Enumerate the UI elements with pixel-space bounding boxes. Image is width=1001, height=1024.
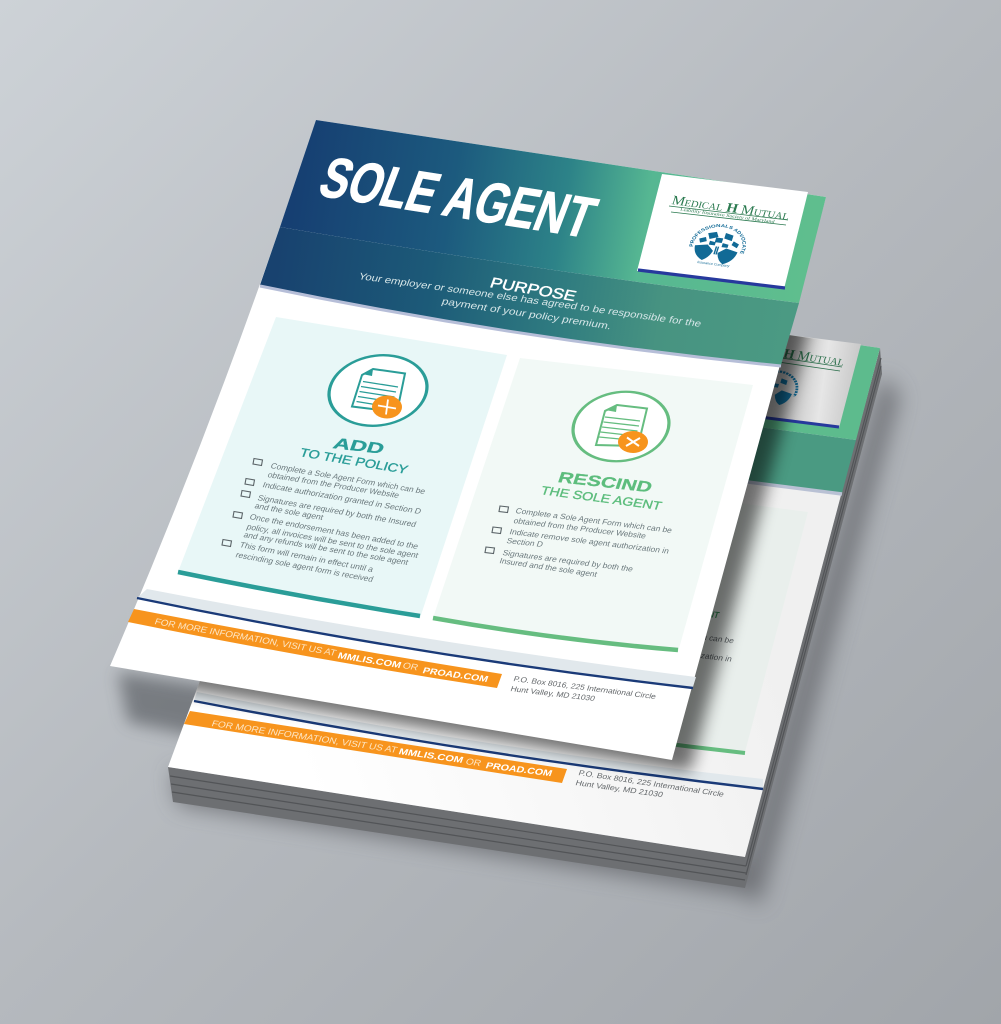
rescind checkboxes [485,506,508,554]
stack page edges [168,348,882,888]
add list: obtained from the Producer Website [266,470,401,500]
shadow: top sheet on stack [192,335,818,782]
purpose heading: PURPOSE [488,275,579,305]
rescind list: Indicate remove sole agent authorization in [508,527,671,555]
banner text [153,617,490,685]
header lower band [260,227,799,365]
add panel bar [178,572,420,616]
add list [234,461,427,584]
logo rules [669,206,788,225]
add panel background [178,317,507,618]
rescind panel background [433,358,753,652]
stack header [310,273,880,494]
header [260,120,826,366]
orange banner [128,609,502,688]
stack logo wordmark: MEDICAL H MUTUAL [729,340,846,369]
stack panel text: THE SOLE AGENT [649,603,721,621]
rescind list: Signatures are required by both the [501,548,635,573]
top sheet [110,120,826,760]
header rule [260,286,781,366]
rescind list [498,506,674,579]
stack top page [168,273,880,857]
add list: This form will remain in effect until a [238,540,375,574]
stack footer [184,692,763,799]
stack banner text: PROAD.COM [484,761,554,779]
stack navy rule [194,701,763,789]
stack footer band [194,692,763,788]
stack orange banner [184,711,567,783]
logo wordmark: MEDICAL H MUTUAL [670,194,791,223]
header upper band [280,120,826,303]
add list: Indicate authorization granted in Section D [261,480,423,516]
rescind heading: THE SOLE AGENT [539,484,664,513]
add heading: TO THE POLICY [298,446,410,476]
purpose text: Your employer or someone else has agreed to be responsible for the [357,271,703,329]
shadow: top sheet on surface [118,672,300,738]
stack banner text: MMLIS.COM [397,747,465,766]
add list: Once the endorsement has been added to the [248,512,420,551]
stack logo emblem [749,369,802,407]
stack banner text [210,719,554,779]
rescind list: Complete a Sole Agent Form which can be [514,506,674,535]
stack rescind panel [480,480,808,753]
rescind list: Insured and the sole agent [498,556,599,579]
rescind heading: RESCIND [556,469,654,496]
sheet paper [110,120,826,760]
stack rescind panel: Complete a Sole Agent Form which can be [577,617,735,645]
logo caption: Insurance Company [697,260,730,268]
banner text: OR [401,661,420,673]
stack address: P.O. Box 8016, 225 International Circle [577,768,726,799]
add list: Complete a Sole Agent Form which can be [269,461,427,496]
footer [128,589,696,703]
rescind list: Section D [505,536,544,549]
add checkboxes [222,458,262,546]
rescind panel bar [433,618,678,650]
purpose text: payment of your policy premium. [440,296,613,332]
add heading: ADD [331,435,387,457]
footer band [137,589,696,687]
paper stack [168,335,882,888]
add list: policy, all invoices will be sent to the sole agent [245,522,420,560]
add list: rescinding sole agent form is received [234,550,375,584]
stack rescind panel: Indicate remove sole agent authorization in [572,635,733,663]
stack banner text: OR [464,757,483,769]
rescind heading [539,469,664,513]
address: P.O. Box 8016, 225 International Circle [512,674,658,701]
stack address: Hunt Valley, MD 21030 [574,778,665,799]
logo card [637,174,808,290]
panel: rescind [433,358,753,652]
banner text: MMLIS.COM [336,651,403,671]
rescind list: obtained from the Producer Website [512,516,648,540]
panel: add [178,317,507,618]
shadow: stack on surface [172,375,900,905]
logo subtitle: Liability Insurance Society of Maryland [679,206,776,225]
add list: Signatures are required by both the Insured [256,493,418,529]
add list: and the sole agent [253,501,325,522]
stack banner text: FOR MORE INFORMATION, VISIT US AT [210,719,399,755]
address: Hunt Valley, MD 21030 [509,684,597,703]
title: SOLE AGENT [311,146,605,250]
icon: rescind document [562,386,680,467]
icon: add document [316,348,440,433]
banner text: PROAD.COM [421,666,490,685]
add list: and any refunds will be sent to the sole agent [242,530,410,567]
banner text: FOR MORE INFORMATION, VISIT US AT [153,617,338,658]
stack logo card [704,327,861,428]
navy rule [137,598,693,688]
logo emblem: PROFESSIONALS ADVOCATE [689,224,746,254]
